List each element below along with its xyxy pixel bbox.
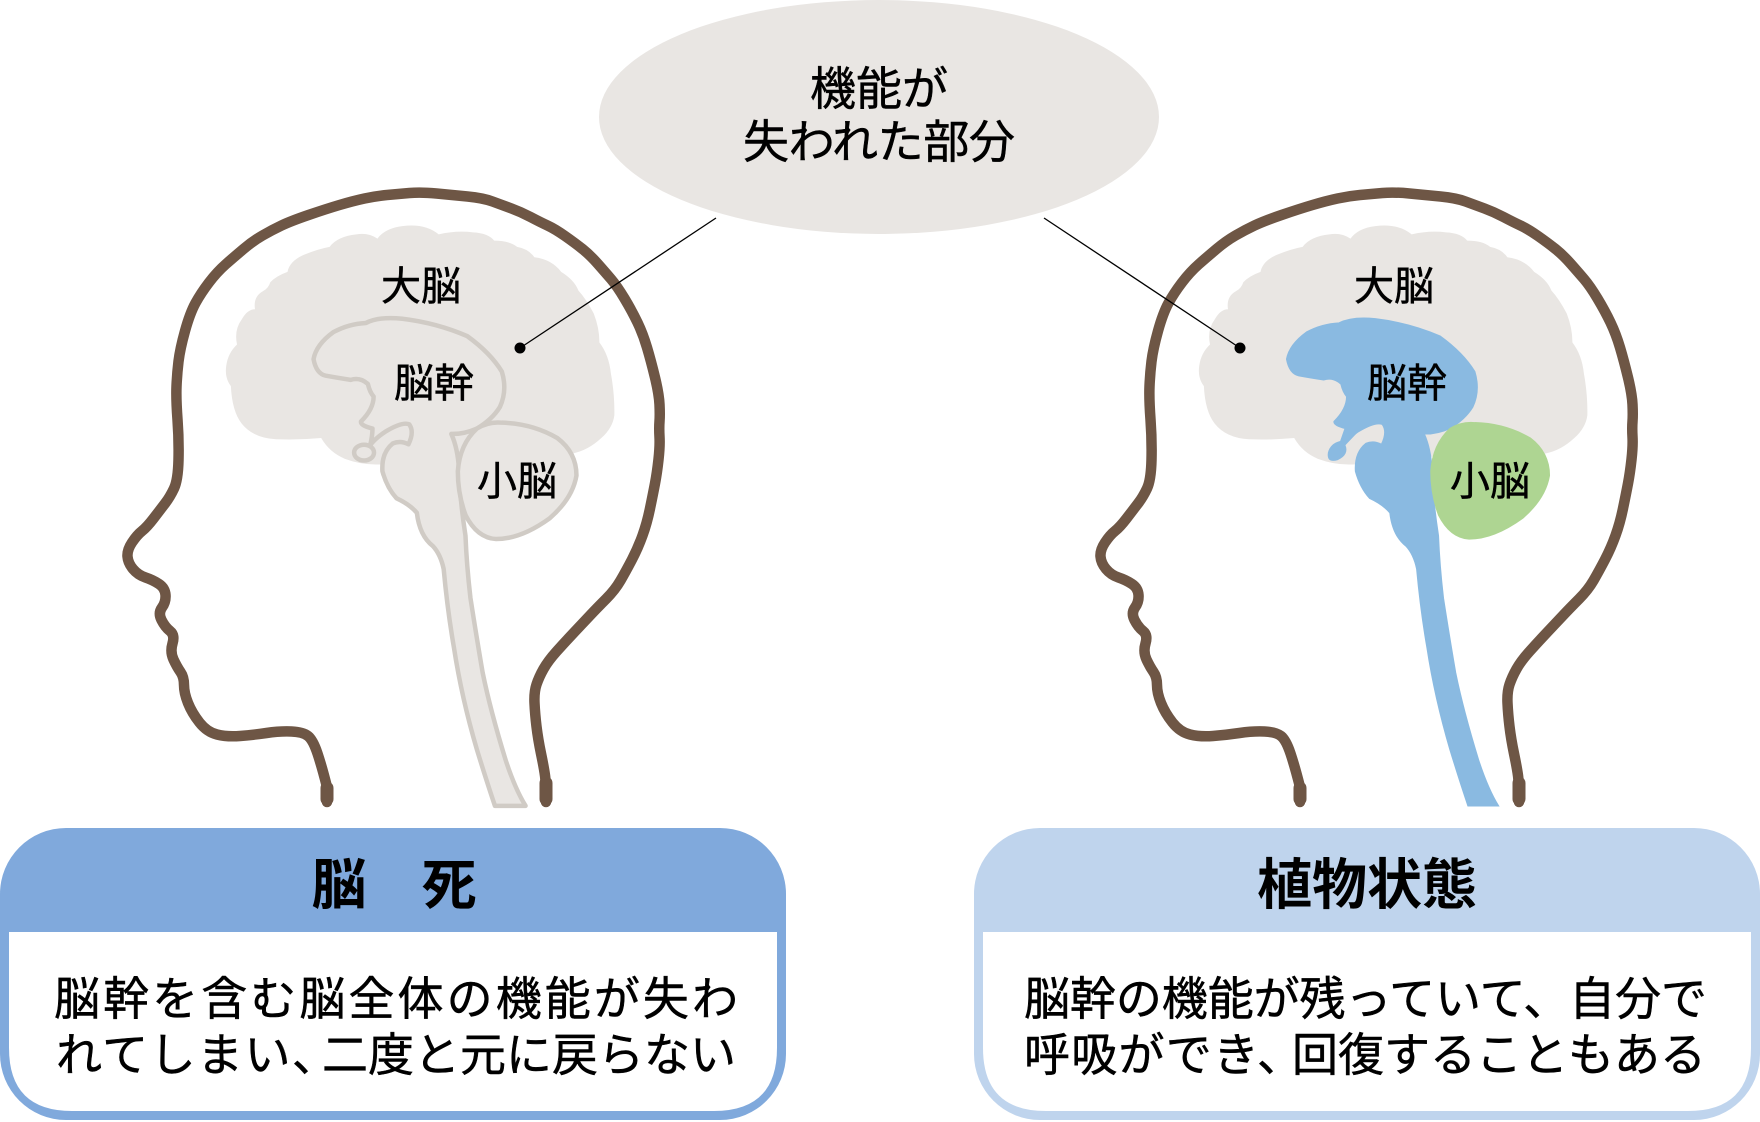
left head outline	[127, 193, 660, 802]
text: vegetative state description: 脳幹の機能が残っていて、自分で	[1024, 973, 1707, 1025]
text: brain death description: 脳幹を含む脳全体の機能が失わ	[54, 973, 738, 1025]
panel: brain death	[0, 828, 786, 1120]
right cerebellum (green)	[1431, 422, 1549, 539]
text: brain death description	[54, 973, 738, 1081]
text: brain death description: れてしまい、	[56, 1029, 338, 1081]
left cerebellum	[458, 422, 576, 539]
oval: lost function callout	[599, 0, 1159, 234]
text: vegetative state description: 回復することもある	[1292, 1029, 1706, 1081]
left label: brainstem: 脳幹	[394, 362, 474, 406]
right label: cerebellum: 小脳	[1450, 460, 1530, 504]
right olfactory bulb (blue)	[1328, 426, 1358, 461]
callout text: 失われた部分	[743, 116, 1015, 168]
right label: cerebrum: 大脳	[1354, 265, 1434, 309]
leader line: left	[514, 218, 716, 354]
leader line: right	[1044, 218, 1246, 354]
left label: cerebellum: 小脳	[477, 460, 557, 504]
panel: vegetative state	[974, 828, 1760, 1120]
left label: cerebrum: 大脳	[381, 265, 461, 309]
illustration: left head with brain (brain death)	[127, 193, 660, 806]
text: brain death description: 二度と元に戻らない	[322, 1029, 736, 1081]
right label: brainstem: 脳幹	[1367, 362, 1447, 406]
left olfactory bulb	[354, 445, 374, 461]
heading: vegetative state: 植物状態	[1257, 854, 1477, 916]
left cerebrum	[226, 226, 614, 465]
illustration: right head with brain (vegetative state)	[1100, 193, 1633, 806]
right brainstem (blue)	[1287, 318, 1499, 806]
callout text: 機能が	[810, 63, 948, 115]
left brainstem	[314, 318, 526, 806]
callout text	[743, 63, 1015, 168]
text: vegetative state description	[1024, 973, 1707, 1081]
heading: brain death: 脳 死	[311, 854, 477, 916]
right cerebrum	[1199, 226, 1587, 465]
text: vegetative state description: 呼吸ができ、	[1024, 1029, 1303, 1081]
right head outline	[1100, 193, 1633, 802]
